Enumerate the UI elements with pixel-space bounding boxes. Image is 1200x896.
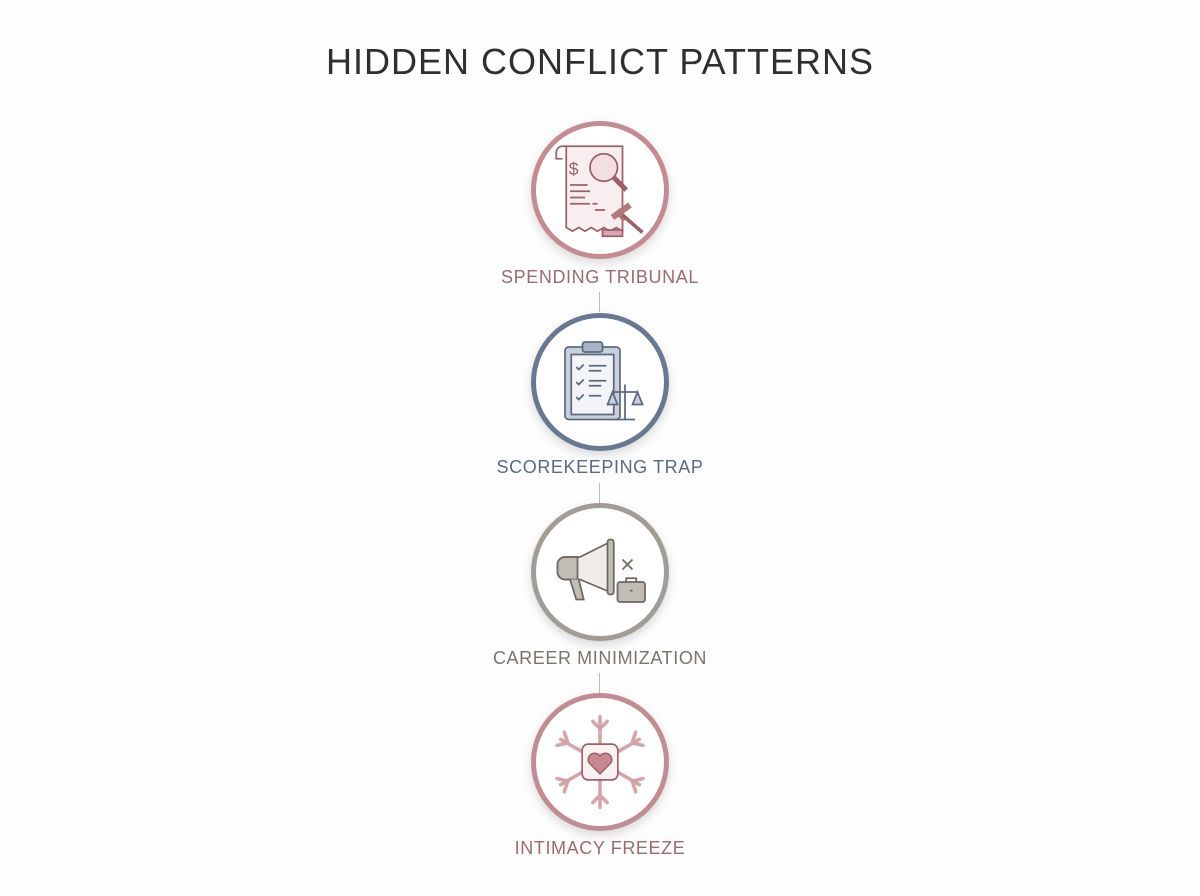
label: CAREER MINIMIZATION — [493, 648, 707, 668]
label: INTIMACY FREEZE — [515, 838, 685, 858]
icon: megaphone briefcase — [531, 503, 669, 641]
label: SPENDING TRIBUNAL — [501, 267, 699, 287]
label: SCOREKEEPING TRAP — [497, 457, 703, 477]
item: spending tribunal — [501, 121, 699, 287]
icon: clipboard scales — [531, 313, 669, 451]
title: HIDDEN CONFLICT PATTERNS — [326, 41, 874, 82]
icon: receipt magnifier gavel: $ — [569, 159, 579, 179]
item: career minimization — [493, 503, 707, 668]
item: intimacy freeze — [515, 693, 685, 858]
icon: receipt magnifier gavel — [531, 121, 669, 259]
item: scorekeeping trap — [497, 313, 703, 477]
icon: snowflake heart — [531, 693, 669, 831]
